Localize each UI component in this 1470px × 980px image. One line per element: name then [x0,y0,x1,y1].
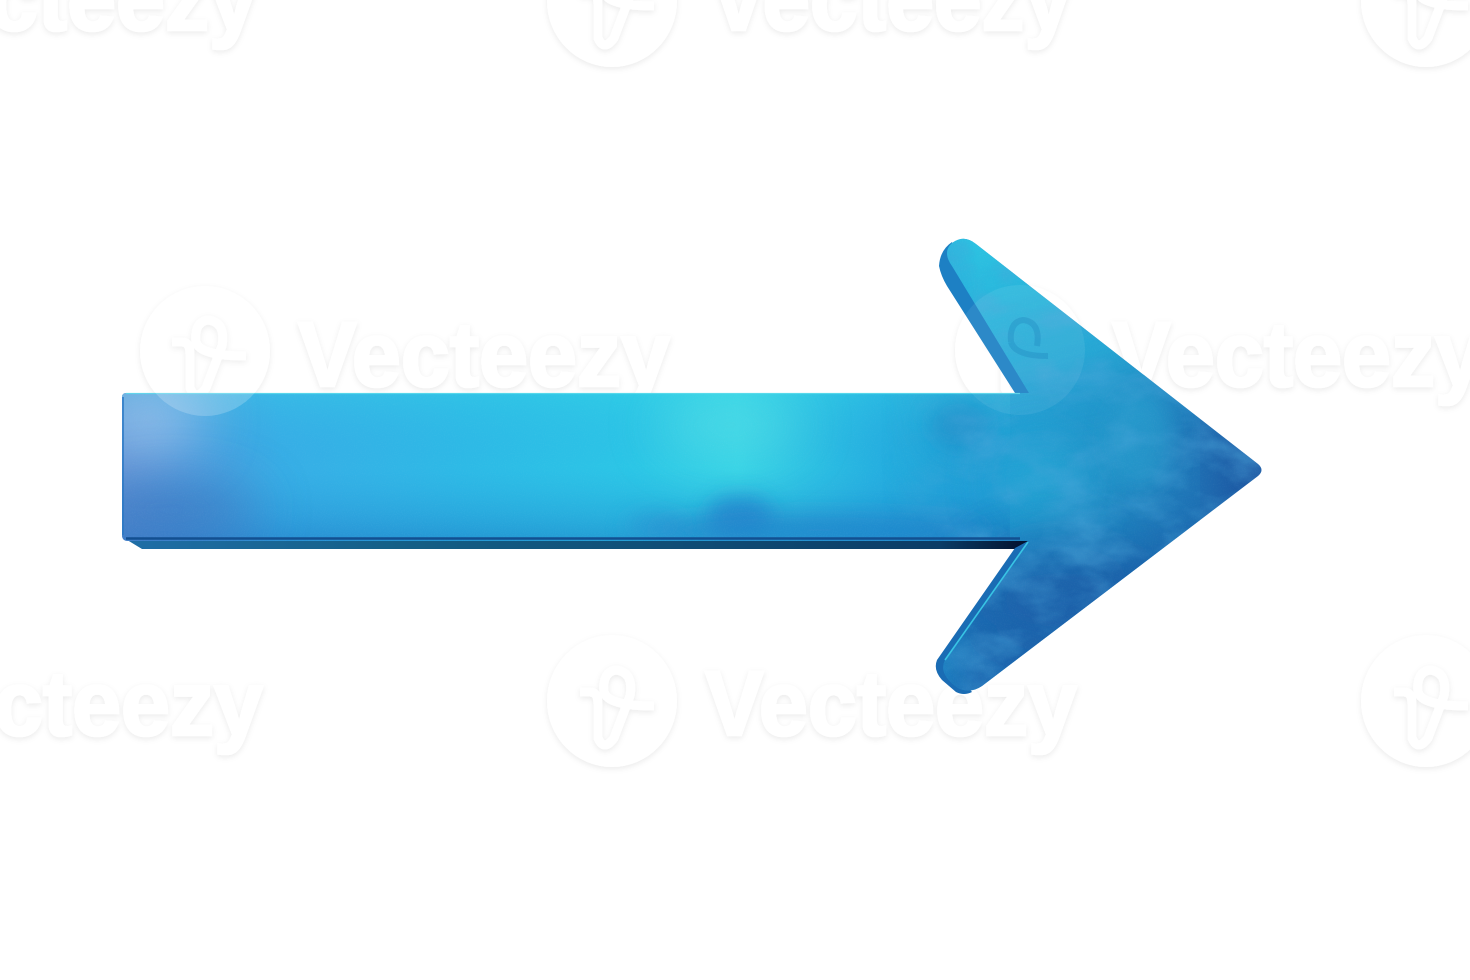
arrow lower barb side wall [936,541,1028,694]
watermark text centre-left: Vecteezy [298,304,670,406]
watermark logo bottom middle [547,635,677,767]
icon: blue 3D arrow [80,230,1280,700]
watermark overlay head logo [955,285,1085,415]
arrow shaft underside [124,538,1030,549]
watermark logo behind arrow head [955,285,1085,415]
arrow face [80,230,1280,700]
arrow top barb side wall [939,242,1030,393]
watermark overlay left logo [140,286,270,416]
watermark overlay on arrow [140,285,1085,416]
watermark row 3 [0,635,1470,767]
watermark row 2 [140,285,1470,416]
watermark text bottom middle: Vecteezy [705,653,1077,755]
arrow highlight edges [126,392,1020,394]
watermark row 1 [0,0,1470,67]
watermark logo middle [547,0,677,67]
watermark logo bottom right [1361,635,1470,767]
watermark logo left [140,286,270,416]
watermark logo right [1361,0,1470,67]
